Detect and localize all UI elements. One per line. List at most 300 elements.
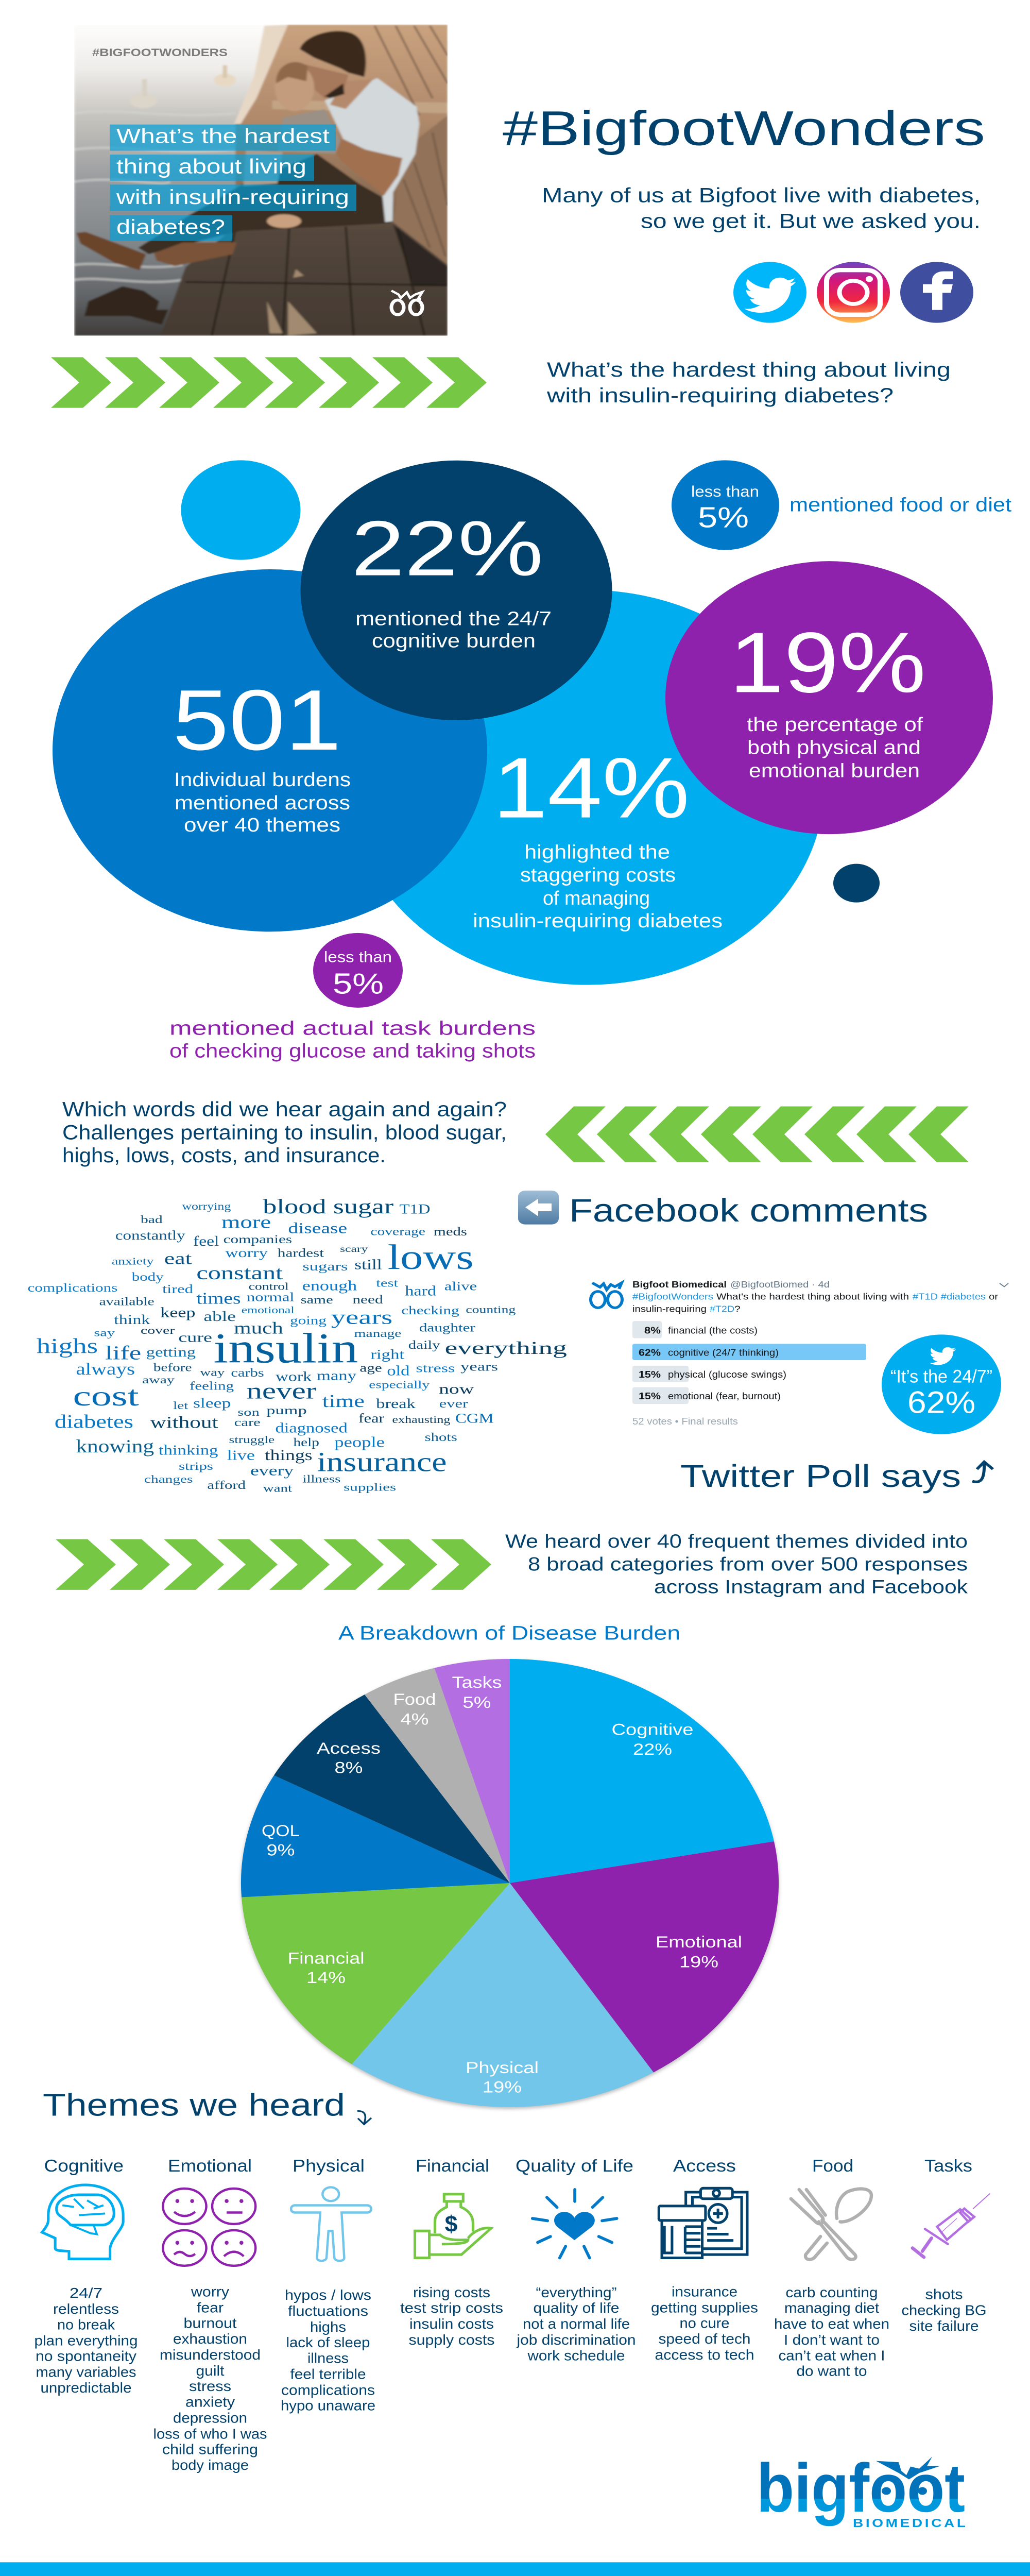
theme list: highs (310, 2319, 346, 2335)
word cloud: Facebook comments: stress (416, 1361, 455, 1375)
tweet body: ? (734, 1304, 741, 1314)
bubble: 14% staggering costs (350, 590, 824, 985)
word cloud: Facebook comments: ever (439, 1397, 468, 1410)
word cloud: Facebook comments: keep (160, 1304, 195, 1320)
small navy dot (833, 864, 880, 903)
bubble: 19% physical and emotional: both physical and (747, 736, 921, 758)
arrow: green chevrons 2 (56, 1539, 491, 1590)
word cloud: Facebook comments: time (322, 1391, 365, 1411)
bubble: 14% staggering costs: of managing (543, 887, 650, 909)
tweet body (632, 1292, 999, 1314)
tweet avatar logo (591, 1283, 622, 1308)
callout: It's the 24/7 62% (882, 1334, 1001, 1434)
icon: facebook (900, 262, 973, 323)
bubble: 19% physical and emotional (665, 561, 993, 834)
theme list: site failure (909, 2319, 979, 2334)
intro text (542, 184, 981, 233)
theme list: exhaustion (173, 2332, 247, 2347)
theme list: guilt (196, 2363, 225, 2379)
theme list: insulin costs (409, 2316, 494, 2332)
word cloud: Facebook comments: eat (164, 1249, 192, 1268)
word cloud: Facebook comments: emotional (242, 1304, 295, 1315)
word cloud: Facebook comments: live (227, 1447, 255, 1463)
word cloud: Facebook comments: feel (193, 1233, 219, 1249)
word cloud: Facebook comments: bad (141, 1214, 163, 1226)
theme list: carb counting (786, 2285, 878, 2301)
word cloud: Facebook comments: never (246, 1378, 316, 1404)
theme list: worry (191, 2284, 230, 2300)
bubble: 22% cognitive burden: mentioned the 24/7 (355, 607, 552, 629)
word cloud: Facebook comments: cure (178, 1330, 212, 1345)
word cloud: Facebook comments: complications (28, 1281, 117, 1294)
bubble: 501 individual burdens (53, 569, 487, 931)
word cloud: Facebook comments: T1D (400, 1202, 431, 1217)
theme title: Quality of Life (516, 2156, 633, 2175)
word cloud: Facebook comments: CGM (455, 1411, 494, 1426)
word cloud: Facebook comments: think (114, 1313, 150, 1328)
photo question overlay: with insulin-requiring (116, 186, 349, 209)
theme list: shots (925, 2287, 963, 2302)
word cloud: Facebook comments: supplies (344, 1481, 396, 1494)
bubble: less than 5% tasks: 5% (333, 968, 384, 1000)
word cloud: Facebook comments: tired (162, 1282, 194, 1296)
word cloud: Facebook comments: work (276, 1369, 312, 1384)
tweet body: What's the hardest thing about living with (716, 1292, 909, 1302)
word cloud: Facebook comments: help (294, 1435, 319, 1449)
word cloud: Facebook comments: lows (388, 1237, 474, 1277)
word cloud: Facebook comments: body (132, 1270, 164, 1284)
word cloud: Facebook comments: son (237, 1406, 260, 1419)
slice: Access 8%: 8% (335, 1759, 363, 1777)
theme list: not a normal life (523, 2316, 630, 2332)
theme list: hypo unaware (281, 2398, 375, 2414)
arrow: curved up (972, 1462, 993, 1482)
bubble: 19% physical and emotional: 19% (729, 615, 926, 711)
theme list: job discrimination (517, 2332, 636, 2348)
slice: QOL 9% (241, 1775, 510, 1897)
poll bars: 15% (639, 1391, 661, 1401)
slice: Emotional 19%: Emotional (656, 1933, 742, 1951)
bubble: 501 individual burdens: over 40 themes (184, 814, 340, 836)
word cloud: Facebook comments: illness (302, 1473, 340, 1485)
theme list: anxiety (185, 2395, 235, 2410)
word cloud: Facebook comments: sugars (302, 1259, 348, 1273)
heading: Facebook comments: Facebook comments (569, 1192, 928, 1228)
slice: Tasks 5%: Tasks (452, 1673, 502, 1691)
word cloud: Facebook comments: still (354, 1257, 382, 1273)
theme list: illness (307, 2351, 349, 2366)
word cloud: Facebook comments: test (376, 1277, 398, 1290)
icon: instagram (817, 262, 890, 323)
photo question overlay: What’s the hardest (116, 125, 330, 148)
tweet body: or (989, 1292, 999, 1302)
word cloud: Facebook comments: feeling (190, 1379, 234, 1393)
theme title: Tasks (924, 2156, 972, 2175)
theme title: Emotional (168, 2156, 252, 2175)
word cloud: Facebook comments: cover (141, 1325, 175, 1336)
poll footer: 52 votes • Final results (632, 1417, 738, 1427)
theme list: body image (171, 2458, 249, 2473)
word cloud: Facebook comments: same (301, 1294, 333, 1306)
theme list: rising costs (413, 2285, 490, 2301)
intro text: so we get it. But we asked you. (641, 210, 981, 233)
word cloud: Facebook comments: blood sugar (263, 1195, 393, 1218)
theme list: stress (189, 2379, 231, 2394)
bubble: less than 5% tasks: less than (324, 948, 392, 966)
bubble: less than 5% food: 5% (698, 501, 749, 534)
word cloud: Facebook comments: especially (369, 1379, 430, 1391)
poll bars: physical (glucose swings) (668, 1370, 786, 1380)
word cloud: Facebook comments: enough (302, 1278, 357, 1294)
word cloud: Facebook comments: years (460, 1360, 498, 1374)
theme list: feel terrible (290, 2367, 366, 2382)
themes intro text (505, 1531, 968, 1598)
theme list: quality of life (534, 2301, 619, 2316)
theme list: fear (197, 2300, 224, 2316)
word cloud: Facebook comments: fear (358, 1411, 385, 1426)
column: Quality of Life (516, 2156, 636, 2364)
word cloud: Facebook comments: people (334, 1434, 385, 1450)
photo card: father and child on a dock (74, 25, 448, 336)
word cloud: Facebook comments: times (196, 1289, 241, 1308)
bubble: 501 individual burdens: 501 (173, 672, 341, 768)
icon: brain in head (42, 2185, 123, 2259)
theme list: misunderstood (160, 2347, 261, 2363)
column: Physical (281, 2156, 375, 2414)
poll bars: financial (the costs) (668, 1326, 758, 1336)
word cloud: Facebook comments: getting (146, 1345, 196, 1360)
word cloud: Facebook comments: manage (354, 1328, 401, 1340)
bubble: 19% physical and emotional: emotional burden (749, 759, 920, 781)
bubble: 14% staggering costs: insulin-requiring diabetes (473, 910, 723, 931)
word cloud: Facebook comments: need (352, 1293, 383, 1306)
tweet header: Bigfoot Biomedical (632, 1280, 727, 1290)
icon: faces (163, 2189, 255, 2266)
theme list: supply costs (409, 2332, 495, 2348)
photo logo mark (391, 291, 422, 315)
arrow: green chevrons 1 (51, 357, 487, 408)
bubble: 501 individual burdens: Individual burdens (174, 768, 351, 790)
theme list: depression (173, 2411, 247, 2426)
slice: Financial 14%: Financial (288, 1950, 365, 1968)
slice: Financial 14% (242, 1883, 510, 2064)
icon: left arrow emoji (518, 1191, 559, 1225)
bubble: 501 individual burdens: mentioned across (175, 791, 350, 814)
photo hashtag: #BIGFOOTWONDERS (92, 46, 228, 59)
poll bars (632, 1321, 866, 1404)
word cloud: Facebook comments: available (99, 1296, 154, 1308)
intro text: Many of us at Bigfoot live with diabetes, (542, 184, 981, 207)
slice: Food 4%: Food (393, 1690, 436, 1708)
themes intro text: across Instagram and Facebook (654, 1576, 968, 1598)
word cloud: Facebook comments: struggle (229, 1434, 274, 1445)
word cloud: Facebook comments: checking (401, 1303, 459, 1317)
slice: Food 4% (365, 1668, 510, 1883)
word cloud: Facebook comments: way (200, 1367, 225, 1379)
words intro text: highs, lows, costs, and insurance. (62, 1144, 386, 1167)
footer bar (0, 2562, 1030, 2576)
word cloud: Facebook comments (28, 1195, 567, 1495)
word cloud: Facebook comments: years (331, 1307, 392, 1329)
label: task burdens: mentioned actual task burdens (169, 1017, 536, 1039)
word cloud: Facebook comments: exhausting (392, 1414, 450, 1426)
logo: bigfoot biomedical: bigfoot (757, 2450, 965, 2527)
word cloud: Facebook comments: want (263, 1482, 293, 1495)
theme list (400, 2285, 503, 2348)
theme list: lack of sleep (286, 2335, 370, 2350)
theme list: unpredictable (40, 2381, 132, 2396)
theme title: Access (673, 2156, 736, 2175)
theme list: I don’t want to (784, 2332, 880, 2348)
word cloud: Facebook comments: pump (266, 1403, 307, 1417)
arrow: green chevrons left (545, 1107, 969, 1162)
slice: Tasks 5%: 5% (463, 1693, 491, 1711)
themes intro text: We heard over 40 frequent themes divided into (505, 1531, 968, 1552)
bubble: less than 5% food: less than (691, 483, 759, 500)
word cloud: Facebook comments: more (221, 1212, 271, 1232)
word cloud: Facebook comments: highs (37, 1334, 98, 1358)
word cloud: Facebook comments: insulin (214, 1324, 358, 1372)
word cloud: Facebook comments: break (376, 1396, 416, 1411)
tweet body: #BigfootWonders (632, 1292, 713, 1302)
theme list (651, 2284, 758, 2363)
theme list: test strip costs (400, 2301, 503, 2316)
slice: Tasks 5% (435, 1659, 510, 1883)
word cloud: Facebook comments: every (250, 1463, 294, 1479)
label: food or diet: mentioned food or diet (789, 494, 1011, 516)
bubble: 14% staggering costs: 14% (493, 740, 690, 836)
icon: syringe (913, 2194, 990, 2257)
theme list: “everything” (536, 2285, 617, 2301)
label: task burdens: of checking glucose and taking shots (169, 1040, 536, 1062)
slice: Financial 14%: 14% (306, 1969, 346, 1987)
photo question overlay: diabetes? (116, 216, 225, 239)
theme list: managing diet (784, 2301, 880, 2316)
word cloud: Facebook comments: many (317, 1368, 356, 1383)
column: Financial (400, 2156, 503, 2348)
word cloud: Facebook comments: diabetes (55, 1411, 133, 1432)
word cloud: Facebook comments: everything (445, 1338, 567, 1358)
arrow: curved down (357, 2111, 371, 2124)
slice: Physical 19%: Physical (466, 2059, 539, 2077)
word cloud: Facebook comments: now (439, 1381, 474, 1397)
word cloud: Facebook comments: changes (144, 1473, 193, 1485)
word cloud: Facebook comments: scary (340, 1244, 368, 1254)
word cloud: Facebook comments: hardest (278, 1246, 324, 1260)
question text (546, 359, 951, 407)
slice: Emotional 19%: 19% (679, 1953, 718, 1971)
theme title: Financial (416, 2156, 489, 2175)
column: Access (651, 2156, 758, 2363)
tweet body: insulin-requiring (632, 1304, 707, 1314)
word cloud: Facebook comments: say (94, 1327, 115, 1338)
bubble: 19% physical and emotional: the percentage of (747, 714, 923, 735)
theme list: plan everything (35, 2333, 138, 2349)
theme list (153, 2284, 267, 2473)
word cloud: Facebook comments: coverage (370, 1225, 425, 1238)
bubble: 22% cognitive burden: cognitive burden (372, 630, 536, 652)
icon: money bag on hand: $ (445, 2212, 458, 2236)
word cloud: Facebook comments: away (142, 1374, 175, 1386)
words intro text: Which words did we hear again and again? (62, 1098, 507, 1121)
icon: money bag on hand (415, 2194, 491, 2258)
icon: twitter (733, 262, 806, 323)
light blue decorative bubble (181, 460, 301, 560)
question text: with insulin-requiring diabetes? (546, 384, 894, 407)
theme list: do want to (797, 2364, 867, 2379)
theme title: Cognitive (44, 2156, 124, 2175)
poll bars: 62% (639, 1348, 661, 1358)
word cloud: Facebook comments: without (150, 1413, 218, 1432)
slice: Cognitive 22%: Cognitive (612, 1720, 694, 1739)
theme list: child suffering (162, 2442, 258, 2458)
words intro text: Challenges pertaining to insulin, blood sugar, (62, 1121, 507, 1144)
callout: It's the 24/7 62%: “It’s the 24/7” (890, 1367, 992, 1386)
theme list: complications (281, 2383, 375, 2398)
logo: bigfoot biomedical: BIOMEDICAL (853, 2517, 966, 2530)
slice: Access 8% (274, 1694, 510, 1883)
theme list (517, 2285, 636, 2364)
word cloud: Facebook comments: anxiety (112, 1255, 154, 1267)
photo question overlay: thing about living (116, 155, 306, 178)
bubble chart: statistics (53, 460, 1011, 1062)
word cloud: Facebook comments: strips (179, 1460, 213, 1472)
bubble: 14% staggering costs: staggering costs (520, 863, 676, 886)
poll bars: 15% (639, 1370, 661, 1380)
title: #BigfootWonders (503, 101, 985, 156)
tweet body: #T2D (710, 1304, 734, 1314)
slice: QOL 9%: 9% (267, 1841, 295, 1859)
theme title: Food (812, 2156, 853, 2175)
heading: Twitter Poll says: Twitter Poll says (680, 1459, 961, 1494)
word cloud: Facebook comments: thinking (159, 1442, 218, 1458)
column: Cognitive (35, 2156, 138, 2396)
word cloud: Facebook comments: always (76, 1360, 135, 1378)
word cloud: Facebook comments: old (387, 1363, 409, 1379)
tweet header: @BigfootBiomed · 4d (730, 1280, 830, 1290)
word cloud: Facebook comments: diagnosed (275, 1420, 348, 1436)
bubble: 22% cognitive burden (301, 461, 612, 720)
word cloud: Facebook comments: control (249, 1281, 289, 1292)
theme list: no spontaneity (36, 2349, 137, 2364)
heading: Themes we heard: Themes we heard (43, 2087, 345, 2123)
word cloud: Facebook comments: let (173, 1400, 188, 1412)
word cloud: Facebook comments: counting (466, 1303, 516, 1315)
poll bars: cognitive (24/7 thinking) (668, 1348, 779, 1358)
word cloud: Facebook comments: disease (288, 1220, 347, 1237)
word cloud: Facebook comments: things (265, 1447, 313, 1464)
theme list (35, 2285, 138, 2396)
theme list: 24/7 (70, 2285, 102, 2301)
themes intro text: 8 broad categories from over 500 responses (528, 1553, 968, 1574)
icon: fork and spoon (791, 2189, 871, 2260)
theme list: loss of who I was (153, 2427, 267, 2442)
pie chart: disease burden (241, 1659, 779, 2109)
slice: Physical 19%: 19% (483, 2078, 522, 2096)
word cloud: Facebook comments: age (359, 1361, 382, 1375)
theme list: have to eat when (774, 2316, 889, 2332)
bubble: less than 5% food (672, 460, 779, 550)
word cloud: Facebook comments: carbs (231, 1366, 264, 1380)
slice: Physical 19% (352, 1883, 654, 2107)
word cloud: Facebook comments: sleep (193, 1396, 231, 1411)
tweet body: #T1D #diabetes (913, 1292, 986, 1302)
word cloud: Facebook comments: daughter (419, 1321, 475, 1334)
theme list: can’t eat when I (779, 2348, 885, 2364)
word cloud: Facebook comments: companies (224, 1232, 292, 1246)
poll bars: emotional (fear, burnout) (668, 1391, 781, 1401)
theme list: hypos / lows (285, 2288, 371, 2303)
theme list (774, 2285, 889, 2379)
tweet header (632, 1280, 1008, 1290)
slice: Access 8%: Access (317, 1739, 381, 1757)
theme list: burnout (184, 2316, 237, 2331)
bubble: 14% staggering costs: highlighted the (524, 841, 670, 863)
word cloud: Facebook comments: life (105, 1342, 141, 1364)
word cloud: Facebook comments: before (153, 1362, 192, 1374)
column: Tasks (902, 2156, 990, 2334)
word cloud: Facebook comments: cost (73, 1381, 139, 1412)
theme list: relentless (53, 2301, 119, 2317)
slice: Cognitive 22% (510, 1659, 774, 1883)
icon: heart with rays (533, 2190, 617, 2258)
theme list: getting supplies (651, 2300, 758, 2316)
bubble: less than 5% tasks (313, 933, 403, 1008)
word cloud: Facebook comments: normal (247, 1290, 294, 1304)
word cloud: Facebook comments: alive (444, 1279, 477, 1293)
theme list: no break (57, 2317, 115, 2333)
theme title: Physical (293, 2156, 365, 2175)
theme list: fluctuations (288, 2303, 368, 2319)
word cloud: Facebook comments: constantly (115, 1228, 185, 1243)
word cloud: Facebook comments: going (290, 1314, 327, 1327)
theme list: access to tech (655, 2347, 754, 2363)
word cloud: Facebook comments: meds (434, 1225, 467, 1238)
poll bars: 8% (644, 1326, 661, 1336)
word cloud: Facebook comments: daily (408, 1338, 440, 1351)
word cloud: Facebook comments: constant (196, 1262, 283, 1283)
slice: Emotional 19% (510, 1841, 779, 2072)
slice: Cognitive 22%: 22% (633, 1740, 672, 1758)
photo scene (74, 25, 448, 336)
theme list: no cure (680, 2316, 730, 2331)
column: Emotional (153, 2156, 267, 2473)
icon: body (291, 2187, 371, 2261)
theme list: work schedule (527, 2348, 625, 2364)
word cloud: Facebook comments: able (203, 1308, 236, 1324)
theme list: many variables (36, 2365, 136, 2380)
theme list (902, 2287, 987, 2334)
words intro text (62, 1098, 507, 1167)
word cloud: Facebook comments: shots (425, 1430, 457, 1444)
photo question overlay (110, 125, 356, 241)
icon: clipboard and pill jar (659, 2188, 747, 2258)
label: task burdens (169, 1017, 536, 1062)
word cloud: Facebook comments: worry (226, 1246, 268, 1260)
slice: QOL 9%: QOL (262, 1822, 300, 1840)
question text: What’s the hardest thing about living (547, 359, 951, 381)
tweet: Twitter poll (591, 1280, 1008, 1427)
word cloud: Facebook comments: care (234, 1416, 261, 1429)
theme list (281, 2288, 375, 2414)
theme list: insurance (672, 2284, 737, 2300)
word cloud: Facebook comments: insurance (317, 1447, 447, 1477)
word cloud: Facebook comments: knowing (76, 1435, 154, 1456)
word cloud: Facebook comments: much (234, 1318, 283, 1337)
word cloud: Facebook comments: worrying (182, 1200, 231, 1212)
chart title: A Breakdown of Disease Burden (338, 1622, 680, 1644)
bubble: 22% cognitive burden: 22% (351, 505, 543, 592)
